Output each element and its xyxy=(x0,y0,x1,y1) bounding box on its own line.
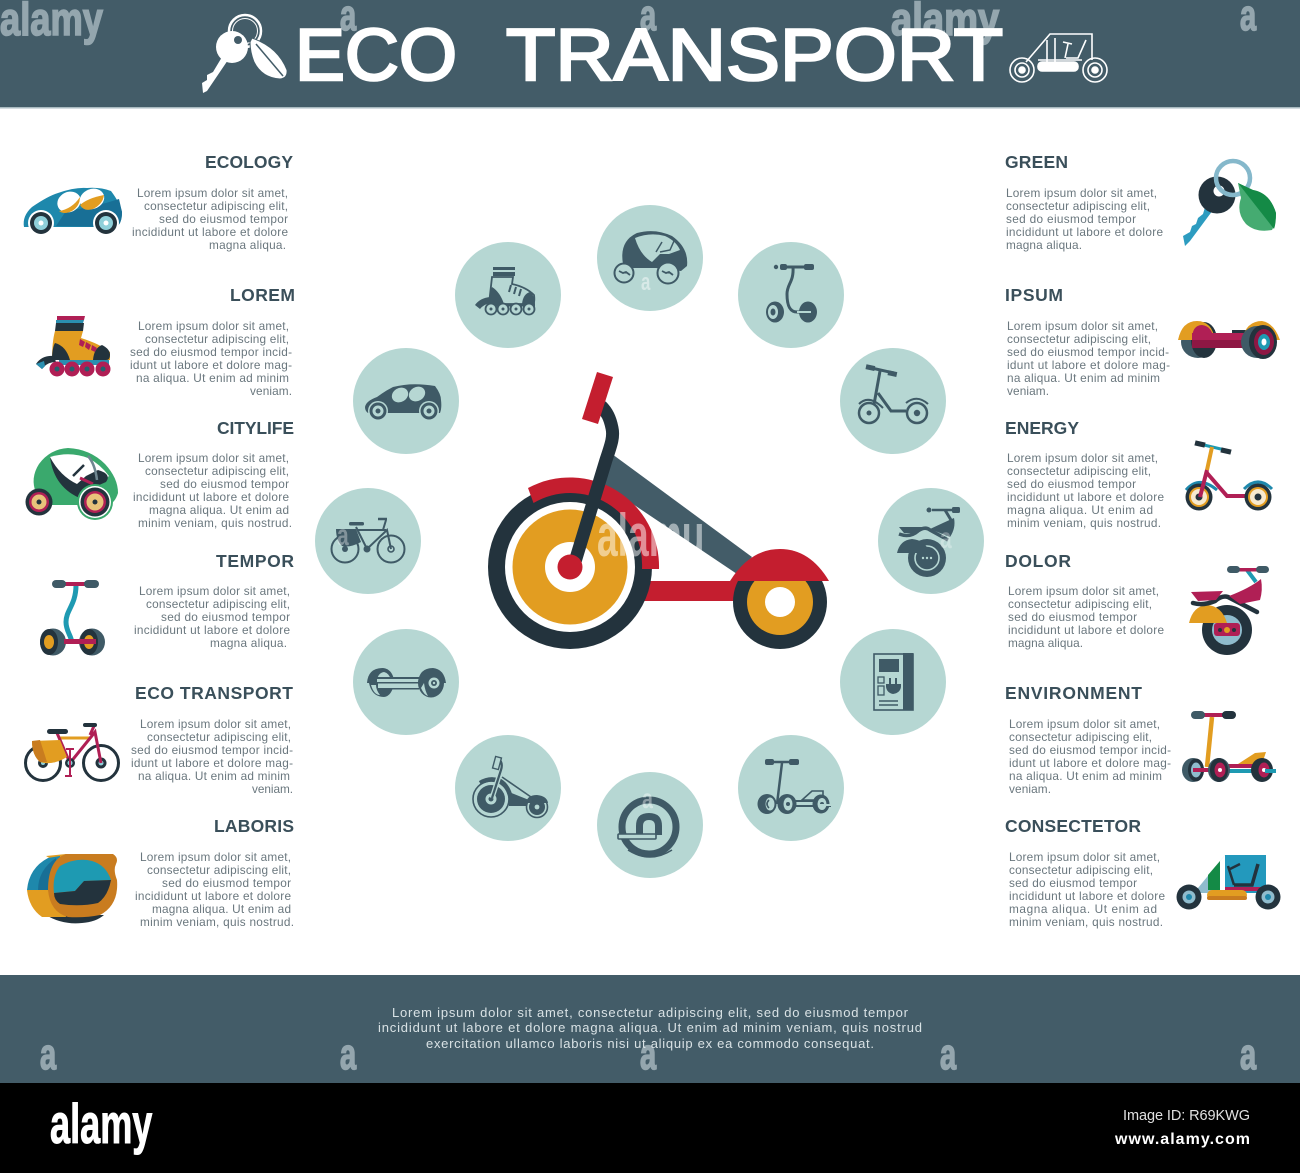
text block: energy: minim veniam, quis nostrud. xyxy=(1007,516,1161,530)
footer band: a xyxy=(640,1029,656,1078)
panel: eco transport xyxy=(26,683,293,796)
text block: ecology xyxy=(132,186,288,252)
panel: tempor xyxy=(40,551,294,656)
footer text: Lorem ipsum dolor sit amet, consectetur adipiscing elit, sed do eiusmod tempor xyxy=(392,1005,909,1020)
text block: laboris: incididunt ut labore et dolore xyxy=(135,889,291,903)
text block: consectetor: sed do eiusmod tempor xyxy=(1009,876,1137,890)
text block: ecology: magna aliqua. xyxy=(209,238,286,252)
icon: header keys xyxy=(202,15,287,93)
panel: green xyxy=(1005,152,1276,252)
stock photo bar xyxy=(0,1083,1300,1173)
icon circle: hoverboard xyxy=(353,629,459,735)
panel: energy xyxy=(1005,418,1272,530)
text block: energy xyxy=(1007,451,1164,530)
text block: ecology: Lorem ipsum dolor sit amet, xyxy=(137,186,288,200)
text block: consectetor: incididunt ut labore et dolore xyxy=(1009,889,1165,903)
text block: consectetor: minim veniam, quis nostrud. xyxy=(1009,915,1163,929)
icon circle: three-wheel scooter xyxy=(738,735,844,841)
text block: citylife: incididunt ut labore et dolore xyxy=(133,490,289,504)
panel: ipsum xyxy=(1005,285,1280,398)
icon: cargo bike xyxy=(26,723,118,780)
footer text: exercitation ullamco laboris nisi ut aliquip ex ea commodo consequat. xyxy=(426,1036,874,1051)
text block: energy: magna aliqua. Ut enim ad xyxy=(1007,503,1153,517)
text block: green: magna aliqua. xyxy=(1006,238,1082,252)
text block: lorem: veniam. xyxy=(250,384,292,398)
icon circle: monowheel xyxy=(597,772,703,878)
text block: eco transport xyxy=(131,717,293,796)
footer band: a xyxy=(340,1029,356,1078)
icon circle: kick scooter xyxy=(840,348,946,454)
text block: lorem: sed do eiusmod tempor incid- xyxy=(130,345,292,359)
central tricycle illustration xyxy=(488,372,829,649)
text block: energy: incididunt ut labore et dolore xyxy=(1007,490,1164,504)
text block: ipsum: veniam. xyxy=(1007,384,1049,398)
text block: ecology: incididunt ut labore et dolore xyxy=(132,225,288,239)
heading: environment: ENVIRONMENT xyxy=(1005,683,1142,703)
text block: green: Lorem ipsum dolor sit amet, xyxy=(1006,186,1157,200)
heading: tempor: TEMPOR xyxy=(216,551,294,571)
icon circle: roller skate xyxy=(455,242,561,348)
text block: green: incididunt ut labore et dolore xyxy=(1006,225,1163,239)
text block: consectetor: Lorem ipsum dolor sit amet, xyxy=(1009,850,1160,864)
footer band xyxy=(0,975,1300,1083)
icon circle: monowheel motorbike: a xyxy=(940,523,952,555)
heading: eco transport: ECO TRANSPORT xyxy=(135,683,293,703)
icon circle: cargo bike xyxy=(315,488,421,594)
heading: lorem: LOREM xyxy=(230,285,295,305)
icon: segway xyxy=(40,580,105,656)
text block: citylife: Lorem ipsum dolor sit amet, xyxy=(138,451,289,465)
icon: roller skate xyxy=(36,316,110,376)
header band xyxy=(0,0,1300,108)
stock photo bar: www.alamy.com xyxy=(1114,1131,1250,1148)
text block: consectetor: magna aliqua. Ut enim ad xyxy=(1009,902,1157,916)
icon: buggy xyxy=(1176,855,1280,910)
text block: lorem: idunt ut labore et dolore mag- xyxy=(130,358,292,372)
panel: laboris xyxy=(27,816,294,929)
text block: citylife: sed do eiusmod tempor xyxy=(160,477,289,491)
text block: energy: consectetur adipiscing elit, xyxy=(1007,464,1151,478)
heading: citylife: CITYLIFE xyxy=(217,418,294,438)
text block: environment: veniam. xyxy=(1009,782,1051,796)
text block: ipsum: Lorem ipsum dolor sit amet, xyxy=(1007,319,1158,333)
icon: monowheel motorbike xyxy=(1189,566,1269,655)
text block: ipsum xyxy=(1007,319,1170,398)
text block: eco transport: idunt ut labore et dolore mag- xyxy=(131,756,293,770)
heading: dolor: DOLOR xyxy=(1005,551,1071,571)
stock photo bar: alamy xyxy=(50,1092,152,1155)
text block: citylife: consectetur adipiscing elit, xyxy=(145,464,289,478)
icon circle: cargo bike: a xyxy=(337,520,349,552)
text block: environment: sed do eiusmod tempor incid- xyxy=(1009,743,1171,757)
text block: eco transport: Lorem ipsum dolor sit amet, xyxy=(140,717,291,731)
text block: environment: na aliqua. Ut enim ad minim xyxy=(1009,769,1162,783)
footer band: a xyxy=(940,1029,956,1078)
text block: tempor: magna aliqua. xyxy=(210,636,287,650)
text block: consectetor xyxy=(1009,850,1165,929)
text block: tempor: Lorem ipsum dolor sit amet, xyxy=(139,584,290,598)
icon: kick scooter xyxy=(1186,441,1272,510)
icon circle: pod car xyxy=(597,205,703,311)
text block: eco transport: sed do eiusmod tempor incid- xyxy=(131,743,293,757)
heading: laboris: LABORIS xyxy=(214,816,294,836)
text block: eco transport: veniam. xyxy=(252,782,293,796)
panel: ecology xyxy=(24,152,293,252)
icon circle: pod car: a xyxy=(641,269,651,296)
title: ECO xyxy=(295,15,457,96)
icon: hoverboard xyxy=(1178,321,1280,359)
text block: laboris: consectetur adipiscing elit, xyxy=(147,863,291,877)
heading: energy: ENERGY xyxy=(1005,418,1079,438)
text block: lorem: Lorem ipsum dolor sit amet, xyxy=(138,319,289,333)
icon circle: car xyxy=(353,348,459,454)
heading: consectetor: CONSECTETOR xyxy=(1005,816,1141,836)
text block: green xyxy=(1006,186,1163,252)
heading: green: GREEN xyxy=(1005,152,1068,172)
panel: dolor xyxy=(1005,551,1269,655)
icon circle: monowheel motorbike xyxy=(878,488,984,594)
text block: environment xyxy=(1009,717,1171,796)
text block: laboris xyxy=(135,850,294,929)
text block: ecology: sed do eiusmod tempor xyxy=(159,212,288,226)
text block: environment: Lorem ipsum dolor sit amet, xyxy=(1009,717,1160,731)
text block: laboris: minim veniam, quis nostrud. xyxy=(140,915,294,929)
text block: consectetor: consectetur adipiscing elit, xyxy=(1009,863,1153,877)
text block: dolor: consectetur adipiscing elit, xyxy=(1008,597,1152,611)
icon: blue car xyxy=(24,185,122,236)
heading: ipsum: IPSUM xyxy=(1005,285,1063,305)
text block: lorem: consectetur adipiscing elit, xyxy=(145,332,289,346)
central tricycle illustration: alamu xyxy=(597,502,704,569)
text block: laboris: magna aliqua. Ut enim ad xyxy=(152,902,291,916)
icon circle: segway xyxy=(738,242,844,348)
title xyxy=(295,15,1003,96)
icon: green pod car xyxy=(26,448,118,520)
panel: environment xyxy=(1005,683,1276,796)
text block: green: consectetur adipiscing elit, xyxy=(1006,199,1150,213)
text block: tempor: incididunt ut labore et dolore xyxy=(134,623,290,637)
footer band: a xyxy=(1240,1029,1256,1078)
text block: green: sed do eiusmod tempor xyxy=(1006,212,1136,226)
text block: citylife xyxy=(133,451,292,530)
icon: car key with leaf xyxy=(1183,161,1276,246)
panel: lorem xyxy=(36,285,295,398)
text block: lorem xyxy=(130,319,292,398)
text block: lorem: na aliqua. Ut enim ad minim xyxy=(136,371,289,385)
text block: eco transport: consectetur adipiscing elit, xyxy=(147,730,291,744)
text block: dolor xyxy=(1008,584,1164,650)
text block: eco transport: na aliqua. Ut enim ad minim xyxy=(138,769,290,783)
text block: laboris: Lorem ipsum dolor sit amet, xyxy=(140,850,291,864)
text block: environment: idunt ut labore et dolore mag- xyxy=(1009,756,1171,770)
text block: laboris: sed do eiusmod tempor xyxy=(162,876,291,890)
footer text xyxy=(378,1005,922,1051)
text block: citylife: magna aliqua. Ut enim ad xyxy=(149,503,289,517)
text block: tempor: consectetur adipiscing elit, xyxy=(146,597,290,611)
panel: citylife xyxy=(26,418,294,530)
text block: citylife: minim veniam, quis nostrud. xyxy=(138,516,292,530)
text block: tempor: sed do eiusmod tempor xyxy=(161,610,290,624)
text block: dolor: incididunt ut labore et dolore xyxy=(1008,623,1164,637)
icon circle: charging station xyxy=(840,629,946,735)
text block: ipsum: consectetur adipiscing elit, xyxy=(1007,332,1151,346)
text block: ipsum: idunt ut labore et dolore mag- xyxy=(1007,358,1170,372)
icon circle: tricycle xyxy=(455,735,561,841)
icon: header buggy xyxy=(1010,34,1107,82)
text block: ecology: consectetur adipiscing elit, xyxy=(144,199,288,213)
text block: dolor: magna aliqua. xyxy=(1008,636,1083,650)
heading: ecology: ECOLOGY xyxy=(205,152,293,172)
title: TRANSPORT xyxy=(506,15,1003,96)
text block: ipsum: na aliqua. Ut enim ad minim xyxy=(1007,371,1160,385)
icon circle: monowheel: a xyxy=(642,784,653,815)
text block: energy: sed do eiusmod tempor xyxy=(1007,477,1136,491)
icon: three-wheel scooter xyxy=(1182,711,1276,782)
text block: energy: Lorem ipsum dolor sit amet, xyxy=(1007,451,1158,465)
text block: tempor xyxy=(134,584,290,650)
footer text: incididunt ut labore et dolore magna aliqua. Ut enim ad minim veniam, quis nostrud xyxy=(378,1020,922,1035)
stock photo bar: Image ID: R69KWG xyxy=(1123,1108,1250,1124)
icon: helmet xyxy=(27,854,117,923)
footer band: a xyxy=(40,1029,56,1078)
text block: dolor: Lorem ipsum dolor sit amet, xyxy=(1008,584,1159,598)
text block: dolor: sed do eiusmod tempor xyxy=(1008,610,1137,624)
panel: consectetor xyxy=(1005,816,1280,929)
text block: ipsum: sed do eiusmod tempor incid- xyxy=(1007,345,1169,359)
text block: environment: consectetur adipiscing elit, xyxy=(1009,730,1152,744)
